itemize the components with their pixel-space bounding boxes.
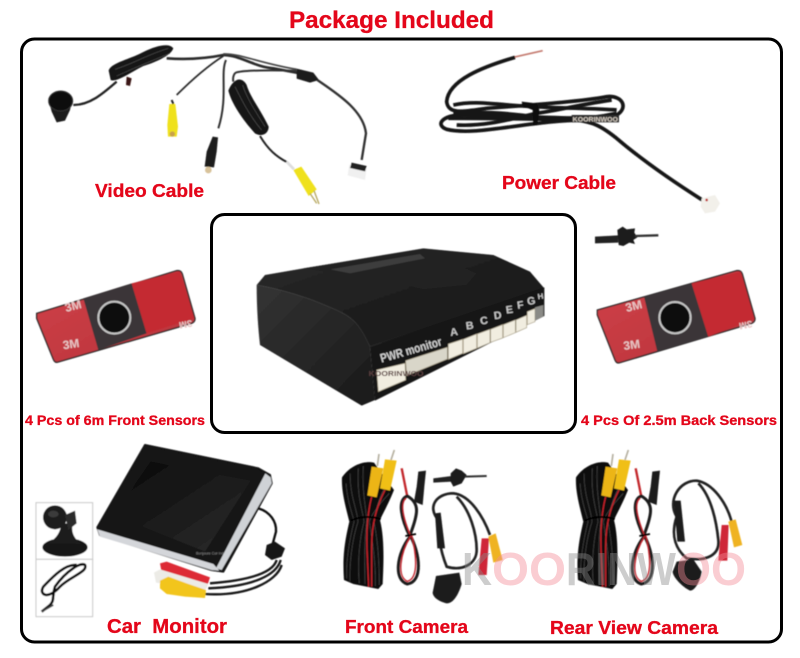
watermark: KOORINWOO: RINW bbox=[566, 543, 677, 595]
watermark: KOORINWOO: OO bbox=[492, 543, 566, 595]
item label: front camera: Front Camera bbox=[345, 617, 469, 637]
unit port letters: F bbox=[516, 299, 525, 312]
unit label: PWR monitor: PWR monitor bbox=[379, 335, 444, 366]
item label: back sensors: 4 Pcs Of 2.5m Back Sensors bbox=[581, 413, 777, 428]
sensor 3M marks: 3M bbox=[62, 336, 80, 352]
item label: front sensors: 4 Pcs of 6m Front Sensors bbox=[25, 413, 205, 428]
monitor RCA plugs bbox=[154, 562, 210, 598]
sensor 3M marks: 3M bbox=[63, 297, 83, 315]
item: car monitor: Bonjoure Cor Ind bbox=[196, 552, 224, 556]
sensor 3M marks: 3M bbox=[178, 317, 193, 330]
sensor 3M marks bbox=[62, 297, 193, 352]
unit port letters: C bbox=[479, 315, 489, 328]
watermark: KOORINWOO: K bbox=[462, 543, 492, 595]
unit port letters: B bbox=[465, 320, 475, 333]
unit port letters: G bbox=[526, 295, 536, 308]
item: power cable: KOORINWOO bbox=[573, 116, 618, 123]
monitor accessory thumbnails bbox=[36, 503, 93, 617]
item: parking sensor control unit bbox=[257, 248, 544, 406]
back sensor 3M marks bbox=[622, 297, 753, 353]
item: front sensor bbox=[37, 271, 195, 362]
item: back sensor bbox=[597, 271, 755, 363]
item label: video cable: Video Cable bbox=[95, 181, 204, 201]
item: rear view camera kit bbox=[576, 450, 742, 591]
back sensor 3M marks: 3M bbox=[738, 318, 753, 331]
unit port letters: H bbox=[537, 292, 544, 301]
unit watermark: KOORINWOO bbox=[369, 369, 424, 378]
item: power cable bbox=[441, 51, 720, 213]
unit port letters: E bbox=[505, 304, 514, 317]
panel: control unit box bbox=[212, 214, 576, 432]
item label: car monitor: Car Monitor bbox=[107, 616, 227, 638]
back sensor 3M marks: 3M bbox=[624, 297, 644, 315]
item label: power cable: Power Cable bbox=[502, 173, 616, 193]
watermark: KOORINWOO: OO bbox=[676, 543, 746, 595]
back sensor 3M marks: 3M bbox=[622, 337, 641, 353]
item: video cable bbox=[48, 45, 367, 204]
title: Package Included bbox=[289, 7, 494, 34]
item label: rear view camera: Rear View Camera bbox=[550, 618, 719, 638]
watermark: KOORINWOO bbox=[462, 543, 746, 595]
item: car monitor bbox=[36, 445, 285, 617]
unit connector ports bbox=[377, 309, 535, 392]
unit port letters bbox=[449, 292, 544, 339]
unit port letters: A bbox=[449, 326, 459, 339]
item: front camera kit bbox=[342, 450, 503, 603]
unit port letters: D bbox=[493, 309, 503, 322]
item: hole saw drill bit bbox=[595, 227, 658, 246]
